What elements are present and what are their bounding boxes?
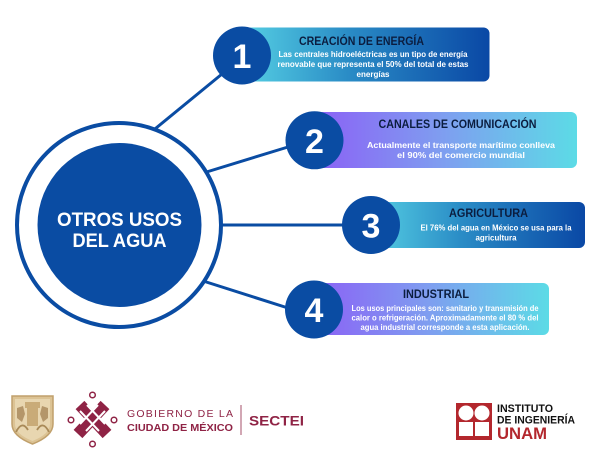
logo: Instituto de Ingeniería UNAM xyxy=(456,403,575,443)
central title: OTROS USOS xyxy=(57,209,182,231)
panel 1: creación de energía: 1 xyxy=(233,38,251,76)
logo: Instituto de Ingeniería UNAM: DE INGENIERÍA xyxy=(497,414,575,426)
panel 3: agricultura: AGRICULTURA xyxy=(449,208,528,220)
panel 2: canales de comunicación: Actualmente el transporte marítimo conlleva xyxy=(367,140,555,150)
panel 1: creación de energía: renovable que representa el 50% del total de estas xyxy=(278,59,469,69)
divider xyxy=(240,405,242,435)
panel 3: agricultura: agricultura xyxy=(476,232,517,242)
logo text: SECTEI: SECTEI xyxy=(249,412,304,428)
panel 4: industrial: calor o refrigeración. Aproximadamente el 80 % del xyxy=(352,313,538,323)
connector lines xyxy=(150,74,344,308)
panel 4: industrial: INDUSTRIAL xyxy=(403,289,469,301)
panel 3: agricultura: El 76% del agua en México se usa para la xyxy=(420,222,572,232)
panel 3: agricultura: 3 xyxy=(362,208,380,246)
panel 2: canales de comunicación: el 90% del comercio mundial xyxy=(397,150,525,160)
logo: Instituto de Ingeniería UNAM: INSTITUTO xyxy=(497,403,553,415)
panel 2: canales de comunicación: CANALES DE COMUNICACIÓN xyxy=(378,118,536,131)
logo: coat of arms xyxy=(12,396,53,444)
logo: Ciudad de México emblem xyxy=(68,392,117,447)
logo text: Gobierno de la Ciudad de México: CIUDAD DE MÉXICO xyxy=(127,421,233,434)
panel 4: industrial: agua industrial corresponde a esta aplicación. xyxy=(360,322,530,332)
logo text: Gobierno de la Ciudad de México xyxy=(127,408,233,434)
logo: Instituto de Ingeniería UNAM: UNAM xyxy=(497,424,547,443)
panel 1: creación de energía: CREACIÓN DE ENERGÍA xyxy=(299,35,424,48)
central circle xyxy=(17,123,221,327)
panel 1: creación de energía: Las centrales hidroeléctricas es un tipo de energía xyxy=(278,49,468,59)
logo text: Gobierno de la Ciudad de México: GOBIERNO DE LA xyxy=(127,408,233,420)
panel 3: agricultura xyxy=(342,196,585,254)
panel 1: creación de energía: energías xyxy=(356,69,390,79)
panel 1: creación de energía xyxy=(213,26,490,84)
central title: DEL AGUA xyxy=(72,230,166,252)
panel 4: industrial: 4 xyxy=(305,292,324,330)
panel 4: industrial xyxy=(285,280,549,338)
panel 4: industrial: Los usos principales son: sanitario y transmisión de xyxy=(352,303,539,313)
panel 2: canales de comunicación xyxy=(286,111,577,169)
panel 2: canales de comunicación: 2 xyxy=(305,123,324,161)
